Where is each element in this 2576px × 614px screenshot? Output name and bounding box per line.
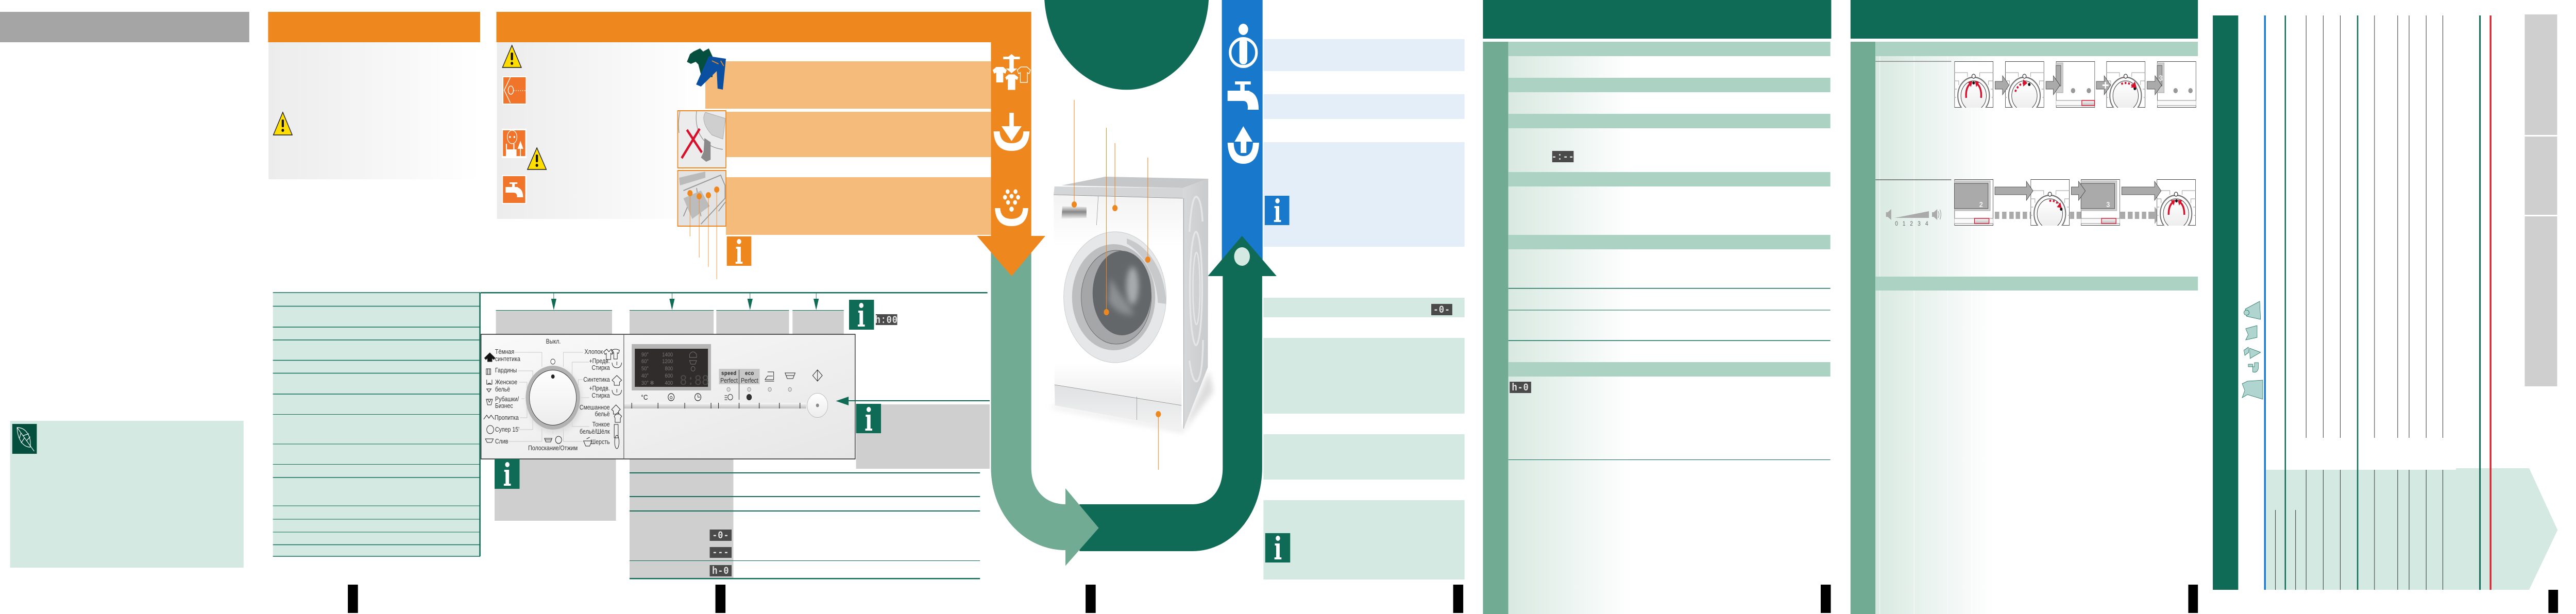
programme labels: Смешанное (580, 404, 610, 411)
page marker (1821, 585, 1831, 613)
programme icons (484, 349, 622, 449)
image: detergent drawer (677, 170, 726, 226)
option icons (724, 370, 822, 400)
programme labels: Бизнес (495, 402, 513, 410)
arrow: step 1 to 2 (1995, 76, 2009, 95)
icon: leaf (12, 424, 37, 454)
start knob (807, 394, 828, 417)
leds (727, 387, 791, 391)
table lines: functions (630, 472, 980, 579)
vertical rules (2264, 15, 2492, 590)
door inner (1081, 250, 1151, 344)
washing machine (1049, 177, 1213, 432)
arrow: to extra (814, 293, 819, 310)
icon: clothes column (2242, 301, 2263, 399)
row 2 screen 2 (1954, 179, 1993, 226)
panel: green note 2 (1263, 338, 1465, 414)
section bar 4 (1509, 172, 1831, 186)
arrow: step 3 to 4 with plus (2096, 76, 2111, 95)
programme labels: Шерсть (590, 438, 610, 446)
display: 600 (665, 373, 673, 379)
step 5: panel result: 3 (2159, 74, 2163, 83)
volume scale: 2 (1910, 220, 1913, 227)
control section top line (481, 292, 988, 294)
machine side (1183, 179, 1208, 429)
icon: warning triangle (528, 148, 546, 169)
grey box top (2525, 14, 2557, 135)
section bar 5 (1509, 235, 1831, 249)
programme labels: бельё/Шёлк (580, 428, 611, 435)
dashed arrow row (1995, 207, 2161, 224)
display: 1400 (662, 352, 673, 358)
programme labels: Рубашки/ (495, 396, 519, 403)
icon: socket and plug (502, 129, 527, 158)
panel: grey warning (268, 42, 480, 179)
grey box 3 (716, 310, 789, 334)
icon: info orange (727, 236, 751, 266)
table: programme list (273, 293, 481, 556)
programme labels: Тёмная (495, 348, 514, 355)
panel: blue note 1 (1263, 39, 1465, 71)
step 1: dial hold (1954, 62, 1993, 114)
icon: water tap (502, 175, 527, 204)
programme labels: Выкл. (546, 338, 561, 345)
display key icons: °C (641, 393, 648, 401)
display: 1200 (662, 359, 673, 365)
icon: info green on right panel (856, 404, 881, 433)
door ring (1072, 244, 1155, 350)
lcd: row 3: h-0 (712, 566, 729, 577)
lcd: care 2: h-0 (1512, 382, 1529, 394)
display key icons (641, 393, 701, 401)
arrow: to display (669, 293, 675, 310)
display: 8:88 (680, 372, 709, 389)
page marker (2188, 585, 2198, 613)
callouts: washer dots with leaders (1072, 100, 1161, 470)
machine front (1054, 195, 1183, 405)
sidebar: sage (1851, 42, 1875, 614)
lcd: row 1: -0- (712, 530, 729, 541)
programme labels: Синтетика (583, 376, 610, 383)
programme labels: бельё (495, 386, 510, 393)
page marker (1086, 585, 1096, 613)
control panel (481, 334, 855, 459)
lcd: care 1: -:-- (1551, 151, 1574, 163)
panel: blue note 3 (1263, 142, 1465, 247)
header: green care (1483, 0, 1831, 39)
arrow: short (2071, 181, 2086, 200)
bar: peach 3 (726, 177, 991, 235)
section bar 6 (1509, 362, 1831, 377)
panel: gradient settings (1875, 42, 1995, 614)
lcd: row 2: --- (712, 547, 729, 558)
speedPerfect ecoPerfect: eco (745, 370, 754, 377)
grey box 1 (496, 310, 612, 334)
grey info panel right (856, 404, 990, 469)
step 2: dial turn (2005, 62, 2044, 114)
programme labels: бельё (595, 411, 610, 418)
page marker (2548, 590, 2558, 613)
icon: info blue (1265, 196, 1290, 225)
programme labels: Полоскание/Отжим (528, 445, 578, 452)
programme labels: Стирка (592, 392, 610, 399)
icon: warning triangle (274, 112, 292, 135)
arrowhead: orange down (977, 236, 1045, 276)
section bar 2 (1875, 277, 2198, 291)
volume scale: 1 (1903, 220, 1905, 227)
display: 30° ✻ (641, 380, 654, 386)
step 5: panel result (2157, 62, 2196, 107)
machine top (1061, 177, 1208, 188)
section bar 3 (1509, 114, 1831, 128)
callouts: drawer dots with leaders (687, 186, 719, 279)
section bar 2 (1509, 78, 1831, 92)
knob (526, 359, 582, 433)
band: green far right (2213, 15, 2238, 590)
machine top strip (1054, 186, 1184, 198)
panel: green note 1 (1263, 298, 1465, 317)
row 2 screen 3: 3 (2106, 200, 2110, 209)
page marker (1453, 585, 1463, 613)
header: orange safety (268, 12, 480, 42)
page marker (348, 585, 358, 613)
grey box 4 (792, 310, 844, 334)
volume scale: 0 (1895, 220, 1898, 227)
display: 400 (665, 380, 673, 386)
header band: orange with down arrow (496, 12, 1031, 248)
panel: eco tip (10, 421, 244, 568)
grey column (630, 459, 733, 578)
row 2 dial home (2157, 179, 2196, 232)
programme labels: Женское (495, 379, 517, 386)
detergent drawer handle (1061, 206, 1087, 219)
programme labels: +Предв. (589, 385, 610, 392)
arrow: long 1 (1995, 181, 2033, 200)
speedPerfect ecoPerfect: Perfect (720, 377, 738, 384)
icon: sort clothes (993, 54, 1030, 90)
button strip (624, 403, 806, 408)
reflection (1108, 267, 1139, 315)
section bar 1 (1509, 42, 1831, 56)
rule 1 (1875, 61, 1951, 62)
programme labels: Супер 15' (495, 426, 519, 433)
arrow: to start button (836, 397, 990, 405)
lcd: top: h:00 (875, 315, 898, 326)
page marker (716, 585, 725, 613)
programme labels: Слив (495, 438, 508, 445)
panel: green note 4 (1263, 500, 1465, 579)
display: 60° (641, 359, 649, 365)
icon: detergent dots (995, 190, 1028, 226)
image: laundry sock in door (677, 111, 726, 168)
speedPerfect ecoPerfect: speed (721, 370, 737, 377)
panel: grey notes with icons (497, 42, 703, 219)
arrow: step 2 to 3 (2046, 76, 2060, 95)
display: 50° (641, 366, 649, 372)
programme labels: Хлопок (584, 348, 603, 355)
panel: gradient care (1509, 42, 1631, 614)
volume scale (1886, 209, 1941, 227)
rule 2 (1875, 179, 1951, 180)
panel: green note 3 (1263, 434, 1465, 480)
row 2 screen 2: 2 (1979, 200, 1983, 209)
programme labels: синтетика (495, 355, 520, 363)
programme labels (495, 338, 611, 452)
icon: load down arrow (994, 113, 1029, 151)
programme labels: Пропитка (495, 414, 519, 421)
programme labels: Гардины (495, 367, 517, 374)
arrow: long 2 (2122, 181, 2161, 200)
step 4: dial turn further (2106, 62, 2145, 114)
grey box middle (2525, 137, 2557, 215)
section bar 1 (1875, 42, 2198, 56)
band: dark green arrow up (1079, 236, 1277, 551)
speedPerfect ecoPerfect (719, 369, 759, 400)
band: blue (1222, 0, 1263, 263)
sidebar: sage (1483, 42, 1509, 614)
programme labels: +Предв. (589, 357, 610, 365)
lcd: green note: -0- (1433, 304, 1450, 316)
arrow: to options (748, 293, 753, 310)
header: green settings (1851, 0, 2198, 39)
icon: info green (849, 300, 874, 330)
icon: eye (502, 76, 527, 105)
door glass (1093, 251, 1151, 335)
arrow: step 4 to 5 (2147, 76, 2162, 95)
band: sage arrow right (991, 242, 1099, 566)
display: 800 (665, 366, 673, 372)
programme labels: Тонкое (592, 421, 610, 428)
icon: blue info circle (1230, 24, 1257, 66)
step 3: panel press (2056, 62, 2095, 107)
icon: warning triangle (502, 45, 521, 67)
top half disc (1044, 0, 1209, 90)
bar: peach 1 (705, 61, 991, 109)
speedPerfect ecoPerfect: Perfect (741, 377, 758, 384)
arrow panel: light green (2266, 468, 2557, 590)
door outer (1064, 232, 1166, 363)
oval in green arrow (1234, 247, 1250, 266)
programme connectors (508, 352, 589, 441)
header: grey left (0, 12, 249, 42)
grey box 2 (630, 310, 714, 334)
volume scale: 4 (1925, 220, 1928, 227)
programme labels: Стирка (592, 364, 610, 371)
grey box bottom (2525, 216, 2557, 386)
icon: info green (1265, 533, 1290, 562)
grey info panel left (495, 459, 616, 521)
icon: blue unload arrow (1228, 126, 1259, 164)
icon: info green on left panel (495, 459, 520, 489)
display: 90° (641, 352, 649, 358)
display: 40° (641, 373, 649, 379)
bar: peach 2 (726, 112, 991, 157)
icon: clothes (687, 48, 726, 90)
shadow (1049, 371, 1213, 432)
row 2 dial turn (2030, 179, 2070, 232)
panel: blue note 2 (1263, 94, 1465, 119)
arrow: to programme (551, 293, 556, 310)
row 2 screen 3 (2081, 179, 2120, 226)
door handle band (1127, 238, 1166, 304)
display (632, 344, 711, 390)
volume scale: 3 (1918, 220, 1921, 227)
care lines (1509, 288, 1831, 460)
icon: blue tap (1228, 81, 1259, 110)
machine bottom plinth (1055, 385, 1181, 429)
